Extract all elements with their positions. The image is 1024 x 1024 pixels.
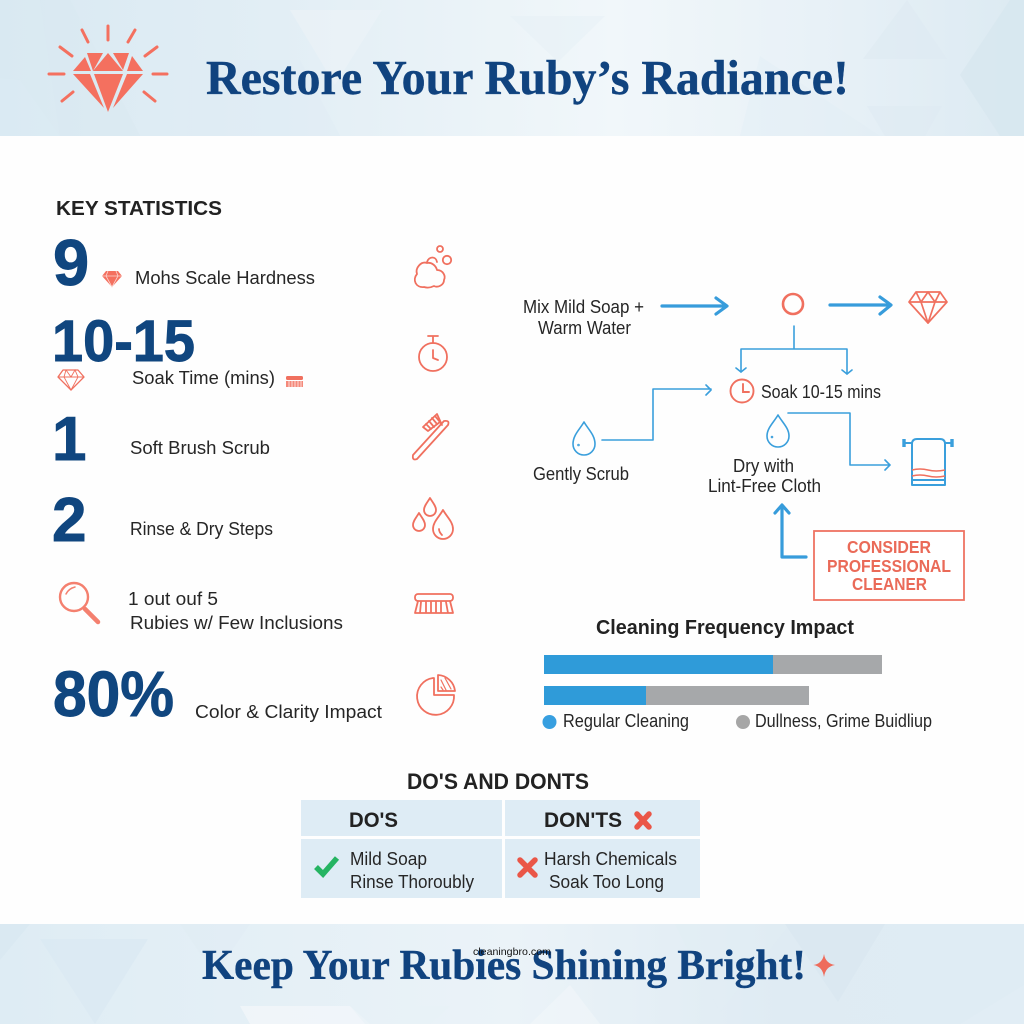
- legend: regular cleaning: Regular Cleaning: [563, 711, 689, 731]
- icon: soap bubbles: [415, 246, 451, 288]
- icon: radiant ruby: [49, 26, 167, 112]
- stat: soak time: Soak Time (mins): [132, 368, 275, 388]
- step: lint-free cloth: Lint-Free Cloth: [708, 476, 821, 496]
- step: warm water: Warm Water: [538, 318, 631, 338]
- icon: toothbrush: [413, 414, 448, 460]
- stat: color and clarity impact: Color & Clarity Impact: [195, 702, 382, 722]
- icon: clock: [730, 380, 754, 402]
- icon: scrub brush: [415, 594, 453, 613]
- stat: mohs hardness: Mohs Scale Hardness: [135, 268, 315, 288]
- icon: drop centre: [767, 415, 789, 447]
- title: Restore Your Ruby’s Radiance!: [206, 50, 849, 105]
- footer slogan: Keep Your Rubies Shining Bright!: [202, 943, 806, 989]
- icon: stopwatch: [419, 336, 447, 371]
- table cell: don'ts header: DON'TS: [544, 809, 622, 832]
- heading: key statistics: KEY STATISTICS: [56, 197, 222, 220]
- step: mix soap: Mix Mild Soap +: [523, 297, 644, 317]
- table cell: do's header: DO'S: [349, 809, 398, 832]
- table cell: do's list: Rinse Thoroubly: [350, 872, 474, 892]
- icon: drop left: [573, 422, 595, 455]
- stat: mohs hardness: 9: [53, 226, 89, 299]
- footer banner: [0, 924, 1024, 1024]
- stat: rinse and dry steps: Rinse & Dry Steps: [130, 519, 273, 539]
- bar: bottom: [544, 686, 809, 705]
- arrow: scrub to soak: [602, 385, 711, 440]
- table cell: do's header: [301, 800, 502, 836]
- stat: rinse and dry steps: [52, 486, 273, 555]
- stat: soft brush scrub: Soft Brush Scrub: [130, 438, 270, 458]
- callout: consider professional cleaner: CONSIDER: [847, 537, 931, 557]
- table cell: don'ts list: Harsh Chemicals: [544, 849, 677, 869]
- icon: sparkle: [814, 954, 835, 977]
- icon: outline ruby: [909, 292, 947, 323]
- callout: consider professional cleaner: PROFESSIONAL: [827, 556, 951, 576]
- panel: cleaning frequency chart: [542, 616, 932, 731]
- stat: soft brush scrub: 1: [52, 405, 86, 474]
- callout: consider professional cleaner: CLEANER: [852, 574, 927, 594]
- arrow: soak to towel: [788, 413, 890, 470]
- stat: soak time: 10-15: [52, 309, 195, 374]
- panel: cleaning process flow: [523, 292, 964, 600]
- heading: cleaning frequency impact: Cleaning Frequency Impact: [596, 616, 854, 639]
- stat: rinse and dry steps: 2: [52, 486, 86, 555]
- step: gently scrub: Gently Scrub: [533, 464, 629, 484]
- callout: consider professional cleaner: [814, 531, 964, 600]
- legend: dullness: Dullness, Grime Buidliup: [755, 711, 932, 731]
- stat: color and clarity impact: 80%: [53, 658, 174, 730]
- table cell: do's list: [301, 839, 502, 898]
- stat: color and clarity impact: [53, 658, 382, 730]
- stat: soft brush scrub: [52, 405, 270, 474]
- stat: soak time: [52, 309, 303, 390]
- panel: key statistics: [52, 197, 455, 730]
- icon: magnifying glass: [60, 583, 98, 622]
- icon: pie chart: [417, 675, 455, 715]
- table cell: don'ts list: [505, 839, 700, 898]
- arrow: mix to circle: [662, 298, 727, 314]
- table cell: do's list: Mild Soap: [350, 849, 427, 869]
- stat: mohs hardness: [53, 226, 315, 299]
- icon: water drops: [413, 498, 453, 539]
- header banner: [0, 0, 1024, 136]
- panel: do's and don'ts: [301, 769, 700, 898]
- stat: rubies with few inclusions: 1 out ouf 5: [128, 589, 218, 609]
- bar: top: [544, 655, 882, 674]
- heading: do's and donts: DO'S AND DONTS: [407, 769, 589, 794]
- arrow: circle to ruby: [830, 297, 891, 314]
- step: dry with: Dry with: [733, 456, 794, 476]
- step: soak: Soak 10-15 mins: [761, 382, 881, 402]
- table cell: don'ts header: [505, 800, 700, 836]
- arrow: professional to dry: [775, 505, 806, 557]
- table cell: don'ts list: Soak Too Long: [549, 872, 664, 892]
- stat: rubies with few inclusions: Rubies w/ Few Inclusions: [130, 613, 343, 633]
- watermark: cleaningbro.com: [473, 946, 551, 958]
- icon: towel: [904, 439, 952, 485]
- stat: rubies with few inclusions: [128, 589, 343, 633]
- arrows: split from circle: [736, 326, 852, 374]
- icon: circle: [783, 294, 803, 314]
